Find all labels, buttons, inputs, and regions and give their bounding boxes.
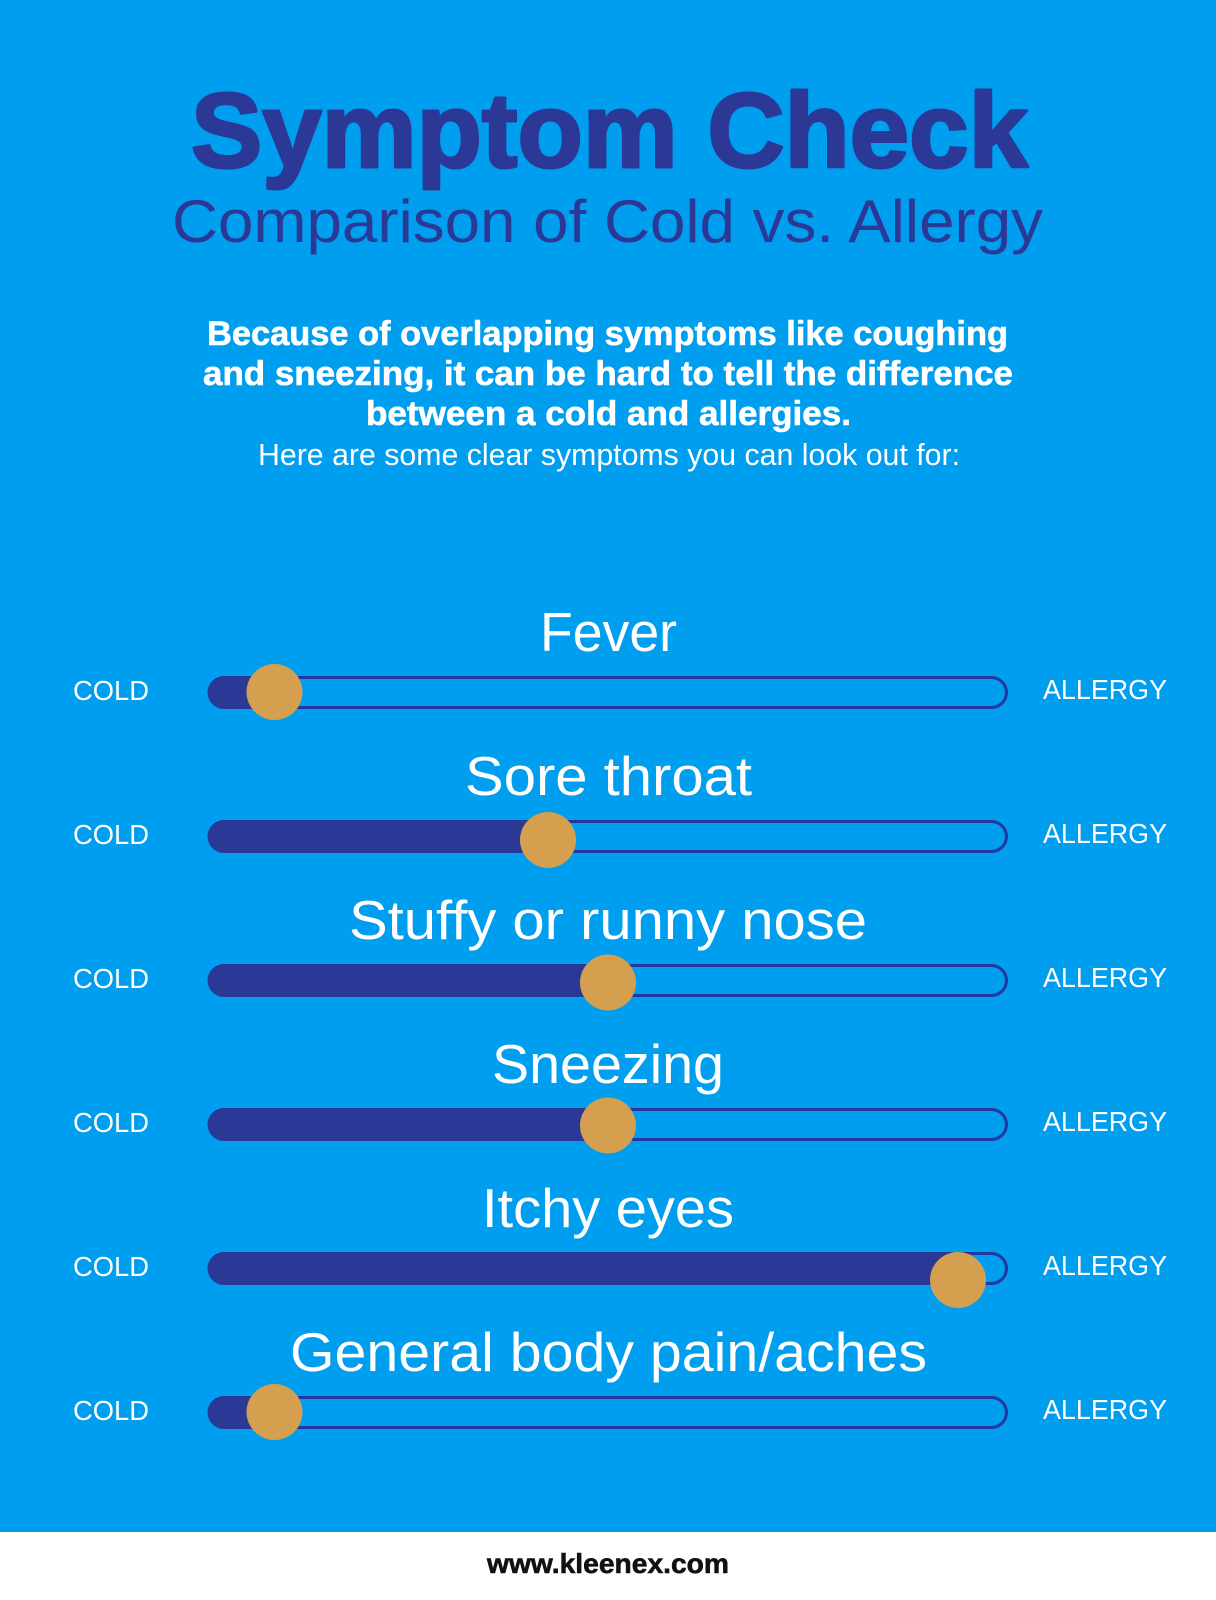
slider row: General body pain/aches: COLD — [73, 1395, 149, 1426]
intro text — [203, 315, 1013, 472]
slider row: Itchy eyes: ALLERGY — [1043, 1250, 1167, 1281]
slider row: Sneezing: ALLERGY — [1043, 1106, 1167, 1137]
slider row: Itchy eyes: COLD — [73, 1251, 149, 1282]
slider row: Stuffy or runny nose: COLD — [73, 963, 149, 994]
slider row: Sneezing: COLD — [73, 1107, 149, 1138]
slider row: Fever — [73, 601, 1167, 720]
slider row: Fever: ALLERGY — [1043, 674, 1167, 705]
subtitle: Comparison of Cold vs. Allergy — [172, 188, 1043, 255]
footer band — [0, 1532, 1216, 1600]
intro text: Because of overlapping symptoms like coughing — [207, 315, 1008, 353]
slider row: General body pain/aches: ALLERGY — [1043, 1394, 1167, 1425]
slider row: Sneezing — [73, 1033, 1167, 1154]
slider row: General body pain/aches — [73, 1321, 1167, 1440]
slider row: Itchy eyes: Itchy eyes — [482, 1177, 734, 1239]
intro text: and sneezing, it can be hard to tell the difference — [203, 355, 1013, 393]
slider row: Sore throat: COLD — [73, 819, 149, 850]
slider row: Sore throat — [73, 745, 1167, 868]
slider row: Fever: Fever — [540, 601, 677, 663]
slider row: Stuffy or runny nose — [73, 889, 1167, 1010]
slider row: General body pain/aches: General body pain/aches — [290, 1321, 927, 1383]
slider row: Sneezing: Sneezing — [492, 1033, 724, 1095]
slider row: Sore throat: ALLERGY — [1043, 818, 1167, 849]
slider row: Fever: COLD — [73, 675, 149, 706]
slider row: Sore throat: Sore throat — [465, 745, 752, 807]
footer url: www.kleenex.com — [486, 1548, 729, 1579]
title: Symptom Check — [191, 72, 1029, 190]
slider row: Stuffy or runny nose: Stuffy or runny nose — [349, 889, 867, 951]
intro text: between a cold and allergies. — [366, 395, 851, 433]
intro text: Here are some clear symptoms you can look out for: — [258, 437, 960, 472]
slider row: Itchy eyes — [73, 1177, 1167, 1308]
slider row: Stuffy or runny nose: ALLERGY — [1043, 962, 1167, 993]
